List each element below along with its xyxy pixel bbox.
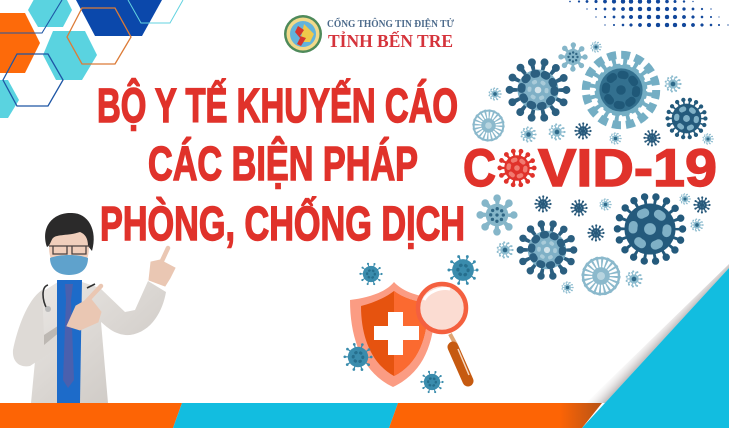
doctor pointing hands	[67, 248, 175, 330]
virus: lower	[421, 371, 443, 393]
doctor illustration	[13, 213, 175, 403]
logo line 2: TỈNH BẾN TRE	[328, 30, 453, 51]
page curl shadow	[586, 264, 729, 403]
title line 2: CÁC BIỆN PHÁP	[148, 136, 418, 191]
icon: shield with magnifier and viruses	[345, 256, 477, 393]
halftone dots: top right	[569, 0, 728, 27]
letters VID-19: VID-19	[538, 139, 717, 198]
letter C: C	[463, 139, 496, 198]
virus: lower left	[345, 344, 371, 370]
doctor head	[45, 213, 94, 275]
virus cluster above COVID-19	[474, 42, 713, 146]
title	[97, 78, 465, 251]
shield	[350, 282, 435, 387]
virus: upper right	[449, 256, 477, 284]
icon: red virus as letter O	[500, 151, 534, 185]
stethoscope	[43, 284, 95, 312]
band: cyan middle	[173, 403, 398, 428]
virus cluster below COVID-19	[480, 194, 710, 294]
logo line 1: CỔNG THÔNG TIN ĐIỆN TỬ	[327, 17, 455, 30]
band: orange left	[0, 403, 182, 428]
logo: Cổng thông tin điện tử tỉnh Bến Tre	[284, 15, 455, 53]
doctor tie	[63, 284, 74, 388]
doctor coat and arms	[13, 281, 166, 403]
title line 3: PHÒNG, CHỐNG DỊCH	[100, 196, 465, 251]
doctor shirt	[57, 280, 82, 403]
bottom band	[0, 403, 602, 428]
title line 1: BỘ Y TẾ KHUYẾN CÁO	[97, 78, 458, 133]
hexagon decoration: top left	[0, 0, 183, 118]
COVID-19 heading	[463, 139, 717, 198]
band: orange right	[389, 403, 602, 428]
cyan corner panel	[582, 268, 729, 428]
magnifier	[418, 284, 469, 381]
virus: upper left	[360, 263, 382, 285]
icon: provincial emblem	[284, 15, 322, 53]
